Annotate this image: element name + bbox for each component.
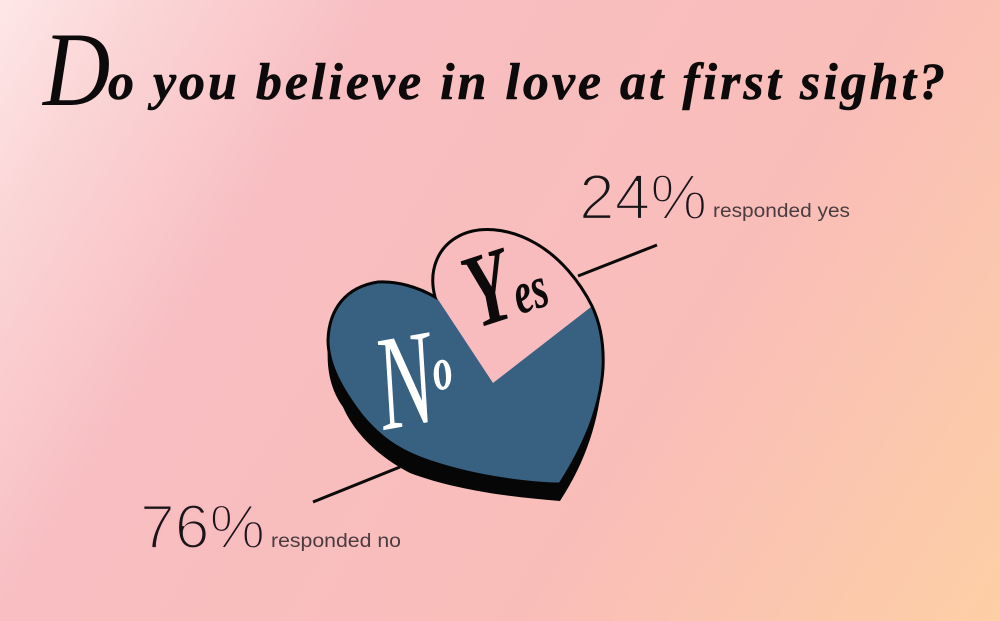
figure 76%: 76% [140, 492, 265, 562]
heart chart [328, 216, 603, 501]
stat: 76% responded no [140, 492, 401, 562]
label: No: N [362, 301, 450, 459]
label: No: o [426, 334, 458, 405]
leader line: yes [578, 245, 657, 276]
figure 24%: 24% [579, 161, 707, 233]
title: D [41, 11, 110, 128]
heart outline [328, 230, 603, 484]
title [41, 11, 945, 128]
slice: no 76% [328, 230, 603, 484]
stat: 24% responded yes [579, 161, 850, 233]
heart extruded shadow [328, 345, 603, 501]
leader line: no [313, 467, 400, 502]
label: Yes: Yes [449, 216, 559, 350]
slice: yes 24% [434, 231, 591, 383]
title: o you believe in love at first sight? [108, 54, 945, 111]
caption no: responded no [271, 530, 401, 552]
caption yes: responded yes [713, 200, 850, 222]
